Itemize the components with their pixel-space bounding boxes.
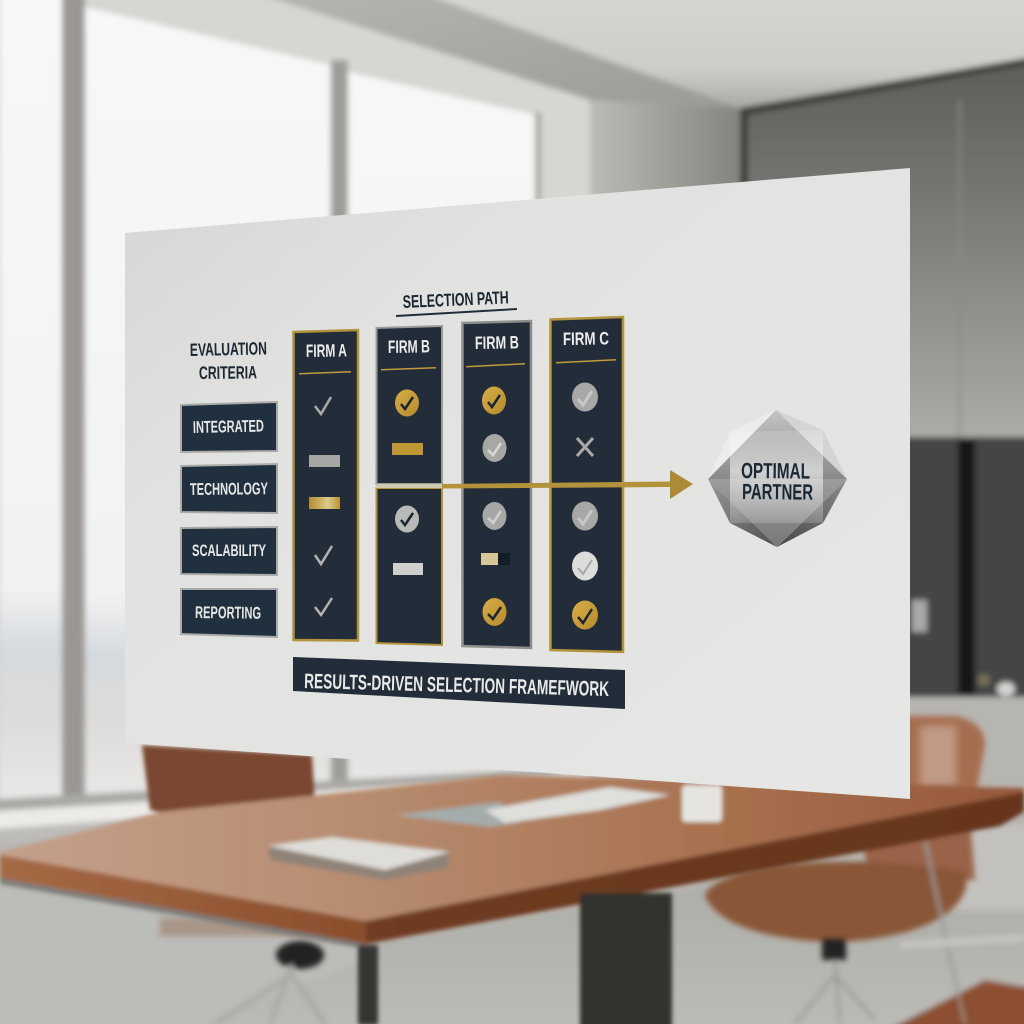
title banner [293, 657, 625, 709]
diamond lower facet [708, 479, 847, 547]
outer upper-right facet [776, 410, 847, 479]
heading: selection path [396, 287, 517, 317]
diamond upper facet [708, 410, 847, 479]
table legs [580, 893, 672, 1024]
heading: evaluation criteria: CRITERIA [199, 362, 257, 383]
firm C label: FIRM C [563, 328, 609, 349]
column: firm B (second) [462, 321, 531, 648]
chair back left [142, 745, 315, 815]
check badge: silver [395, 506, 419, 532]
check badge: gold [395, 390, 419, 416]
cabinet upper [740, 55, 1024, 445]
cabinet lower [740, 437, 1024, 699]
criterion: reporting: REPORTING [195, 603, 261, 623]
heading: evaluation criteria: EVALUATION [190, 338, 267, 360]
firm B label: FIRM B [388, 336, 430, 357]
check badge: gold [572, 600, 598, 630]
floor [0, 830, 1024, 1024]
check badge: gold [482, 598, 506, 626]
column: firm C [550, 317, 623, 652]
badge: optimal partner [708, 410, 847, 547]
rating bar: partial [481, 553, 510, 565]
criterion: technology: TECHNOLOGY [190, 479, 268, 499]
ceiling [385, 0, 1024, 108]
column: firm B (first) [376, 326, 442, 645]
title banner: RESULTS-DRIVEN SELECTION FRAMEFWORK [304, 670, 609, 701]
arrow: selection path to optimal partner [442, 470, 693, 499]
outer upper-left facet [708, 410, 776, 479]
chair back lower right [860, 818, 975, 880]
cross icon [577, 438, 593, 456]
window reveal [0, 0, 590, 820]
outer lower-left facet [708, 479, 777, 547]
sill [0, 768, 560, 812]
check icon [315, 397, 331, 414]
rating bar: silver [309, 455, 340, 467]
column: firm A [294, 330, 358, 640]
badge label: PARTNER [742, 479, 813, 505]
panel: presentation board [125, 168, 910, 799]
check icon [315, 598, 332, 615]
outer lower-right facet [777, 479, 847, 547]
criterion: integrated: INTEGRATED [193, 417, 264, 437]
check badge: silver [482, 502, 506, 530]
chair back right [800, 716, 985, 800]
upper wall [215, 0, 740, 108]
rating bar: gold [392, 443, 423, 455]
credenza [740, 697, 1024, 917]
firm A label: FIRM A [306, 340, 347, 361]
desk objects [395, 802, 520, 827]
check icon [315, 546, 332, 564]
criterion: reporting [181, 589, 277, 637]
criteria list [181, 402, 277, 637]
central square [730, 430, 823, 523]
criterion: integrated [181, 402, 277, 452]
firm B label: FIRM B [475, 332, 519, 353]
criterion: technology [181, 464, 277, 513]
badge label: OPTIMAL [741, 458, 810, 484]
check badge: silver [572, 382, 598, 412]
heading: evaluation criteria [190, 338, 267, 383]
chair seat right [705, 862, 966, 942]
badge label [741, 458, 813, 505]
check badge: gold [482, 386, 506, 414]
chair base left [160, 918, 330, 936]
rating bar: gold [309, 497, 340, 509]
table top [0, 775, 1024, 921]
check badge: silver [572, 502, 598, 530]
check badge: silver [482, 434, 506, 462]
check badge: white [572, 552, 598, 580]
criterion: scalability [181, 527, 277, 575]
criterion: scalability: SCALABILITY [192, 541, 266, 560]
heading: selection path: SELECTION PATH [402, 287, 509, 312]
rating bar: white [393, 563, 423, 575]
